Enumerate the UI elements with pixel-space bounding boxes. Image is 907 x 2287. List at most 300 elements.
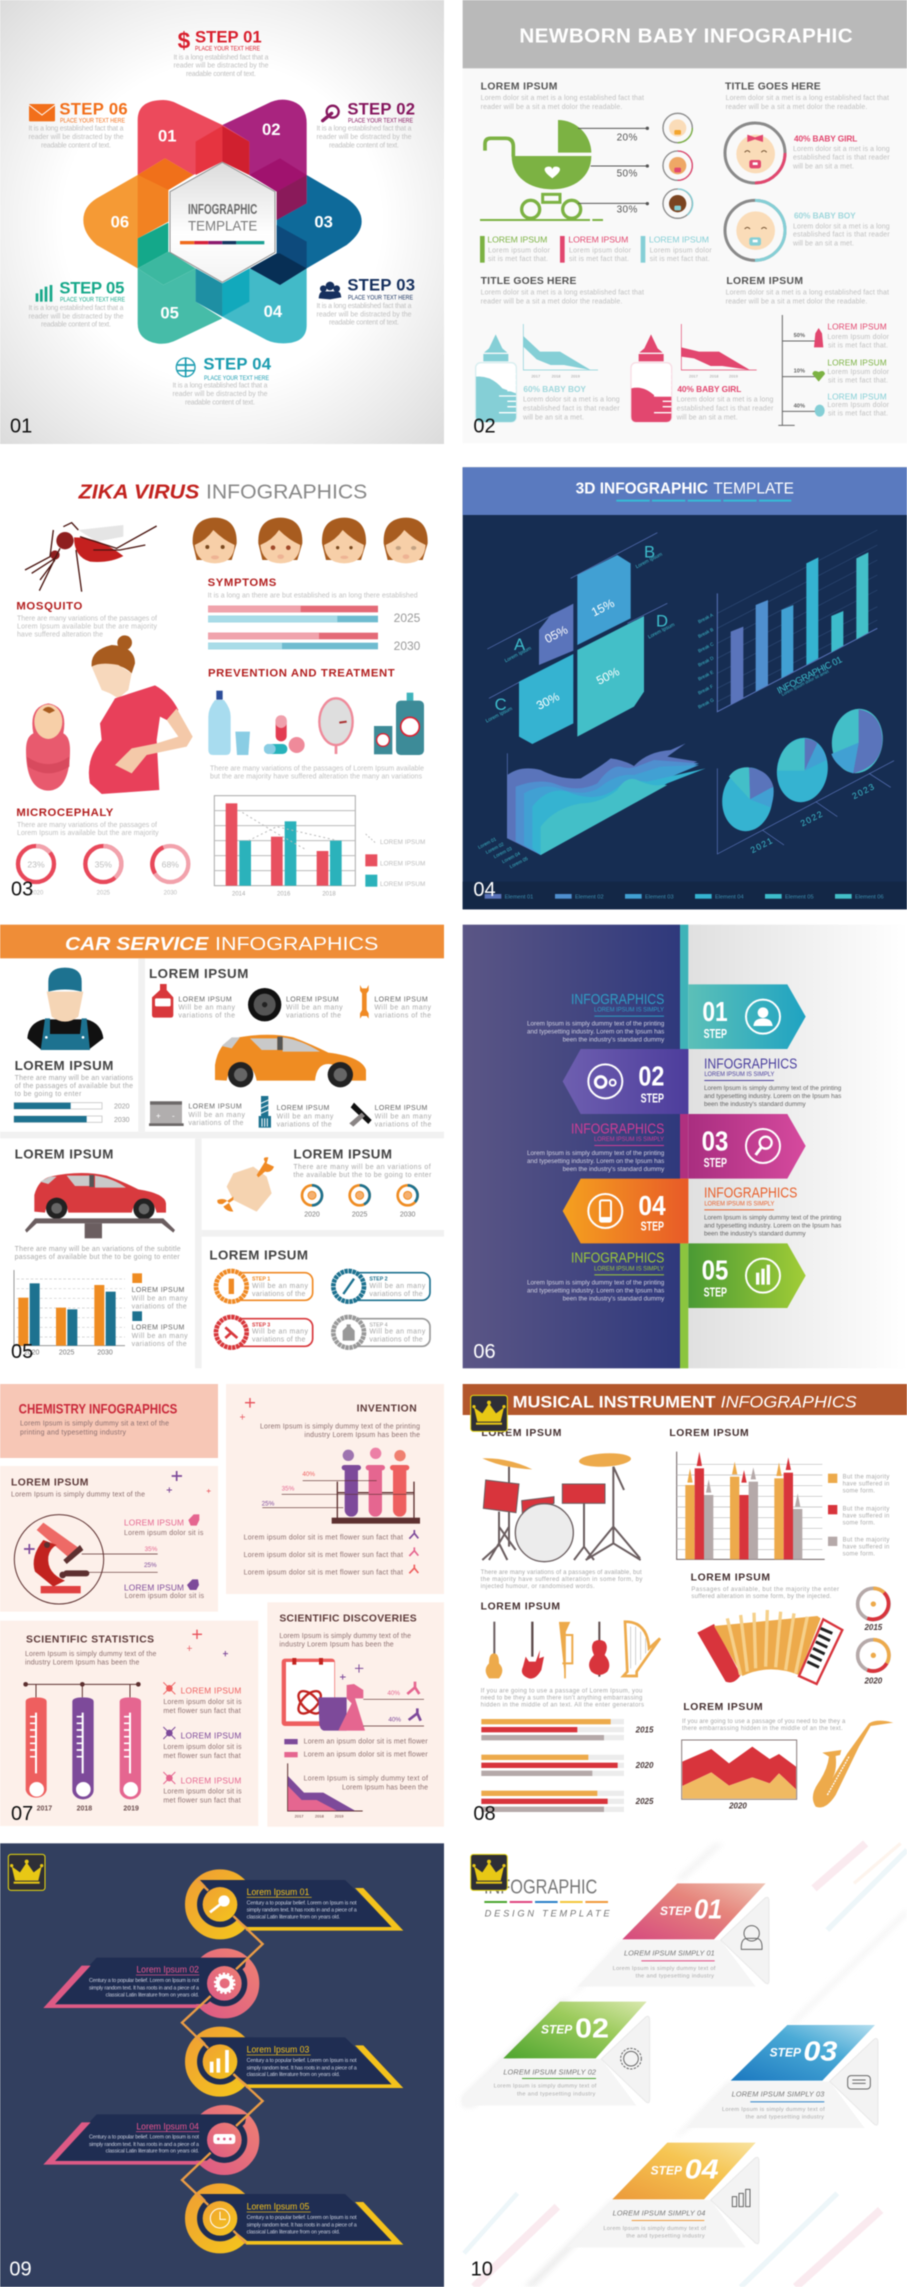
area chart: 2019: [335, 1813, 344, 1818]
text block 04: INFOGRAPHICS: [704, 1186, 798, 1202]
card: scientific discoveries: Lorem an ipsum dolor sit is met flower: [304, 1752, 428, 1759]
arrow 01: STEP: [704, 1027, 727, 1041]
section headings: LOREM IPSUM: [691, 1573, 770, 1584]
text block 01: LOREM IPSUM IS SIMPLY: [594, 1007, 664, 1014]
card: microscope: [0, 1466, 218, 1612]
battery icon item: LOREM IPSUM: [188, 1104, 242, 1111]
chart legend: some form.: [843, 1552, 875, 1558]
text block 02: been the industry's standard dummy: [704, 1101, 806, 1108]
legend strip: Element 04: [715, 895, 744, 901]
pink bottle with chart: Lorem dolor sit a met is a long: [677, 397, 773, 404]
wrench section text: [293, 1147, 432, 1179]
panel 08: musical instruments: [463, 1384, 907, 1825]
illustration: instruments row: [486, 1622, 660, 1679]
panel 09: timeline: [0, 1843, 444, 2287]
section headings and intros: LOREM IPSUM: [481, 81, 557, 92]
pram percentages with leader lines: [578, 127, 649, 216]
bar chart: 2025: [59, 1350, 75, 1357]
card: invention: industry Lorem Ipsum has been the: [304, 1432, 420, 1439]
title banner: [463, 1384, 907, 1415]
title card: printing and typesetting industry: [20, 1429, 126, 1436]
step 02 card: 02: [575, 2012, 609, 2043]
title card: [0, 1384, 218, 1458]
mosquito text: MOSQUITO: [16, 601, 83, 613]
step 03 card: 03: [803, 2035, 838, 2066]
text block 03: [527, 1121, 665, 1173]
arrow 02: [563, 1049, 688, 1114]
chart legend: variations of the: [132, 1303, 187, 1310]
step 1 badge: [216, 1271, 313, 1302]
isometric area chart: Lorem 05: [509, 856, 529, 869]
title: ZIKA VIRUS: [78, 482, 200, 504]
section headings and intros: Lorem dolor sit a met is a long established fact that: [481, 95, 644, 102]
step 2 badge: [333, 1271, 430, 1302]
blue bottle with chart: Lorem dolor sit a met is a long: [523, 397, 620, 404]
panel number 02: 02: [473, 416, 496, 438]
blue bottle with chart: 2018: [552, 373, 561, 378]
step 06 text: PLACE YOUR TEXT HERE: [60, 118, 125, 125]
section headings and intros: [481, 81, 889, 306]
card: invention: Lorem ipsum dolor sit is met flower sun fact that: [244, 1552, 403, 1559]
card: scientific statistics: SCIENTIFIC STATISTICS: [26, 1635, 154, 1646]
text block 04: been the industry's standard dummy: [704, 1230, 806, 1237]
test tubes chart: 35%: [282, 1486, 295, 1493]
title banner: MUSICAL INSTRUMENT: [513, 1392, 716, 1411]
zigzag connector: [182, 1880, 263, 2243]
step 3 badge: STEP 3: [252, 1322, 270, 1328]
isometric tile chart: A: [514, 635, 526, 654]
test tubes chart: 25%: [262, 1500, 275, 1507]
bar chart: 2018: [322, 891, 336, 897]
oil bottle icon item: LOREM IPSUM: [178, 996, 232, 1003]
petal numbers: 03: [314, 213, 333, 232]
card: invention: [226, 1384, 444, 1594]
step 02 text: readable content of text.: [329, 142, 399, 149]
isometric tile chart: [485, 533, 676, 744]
chart legend: LOREM IPSUM: [380, 881, 425, 888]
large baby boy ring: [725, 200, 785, 260]
card: scientific discoveries: Lorem Ipsum is simply dummy text of: [304, 1776, 428, 1783]
area description: [682, 1719, 846, 1732]
step 01: classical Latin literature from on years old.: [247, 1915, 340, 1921]
pink bottle with chart: 2018: [710, 373, 719, 378]
section headings and intros: Lorem dolor sit a met is a long established fact that: [726, 95, 889, 102]
title banner: TEMPLATE: [713, 480, 794, 497]
step 01 text: readable content of text.: [186, 71, 256, 78]
ring gauges: 2020: [863, 1676, 883, 1685]
center hexagon label: TEMPLATE: [188, 218, 257, 234]
step 02 text: reader will be distracted by the: [316, 134, 412, 141]
crown badge: [8, 1854, 45, 1890]
text block 05: LOREM IPSUM IS SIMPLY: [594, 1265, 664, 1272]
illustration: mechanic: [27, 968, 103, 1050]
wrench section text: LOREM IPSUM: [293, 1147, 392, 1162]
baby girl text: 40% BABY GIRL: [794, 133, 857, 143]
card: scientific statistics: Lorem Ipsum is simply dummy text of the: [25, 1651, 156, 1658]
section headings and intros: reader will be a sit a met dolor the readable.: [726, 104, 867, 111]
isometric tile chart: 50%: [594, 664, 622, 688]
panel number 07: 07: [11, 1803, 33, 1825]
card: microscope: 35%: [145, 1546, 158, 1553]
isometric tile chart: Lorem Ipsum: [647, 622, 676, 640]
panel 07: chemistry: [0, 1384, 444, 1827]
vertical percent timeline: LOREM IPSUM: [827, 357, 887, 367]
illustration: drum kit: [482, 1452, 641, 1562]
step 04 text: PLACE YOUR TEXT HERE: [204, 375, 269, 382]
illustration: red car on lift: [25, 1173, 175, 1238]
isometric tile chart: B: [644, 542, 655, 561]
legend blocks: LOREM IPSUM: [568, 234, 628, 244]
card: scientific discoveries: Lorem an ipsum dolor sit is met flower: [304, 1739, 428, 1746]
step 02 card: Lorem Ipsum is simply dummy text of: [494, 2084, 597, 2090]
vertical percent timeline: Lorem Ipsum dolor: [827, 402, 890, 409]
small donut gauges: 2025: [352, 1211, 368, 1218]
step 05 text: STEP 05: [59, 278, 124, 297]
text block 03: been the industry's standard dummy: [563, 1166, 665, 1173]
chart legend: LOREM IPSUM: [132, 1325, 185, 1332]
text block 05: [527, 1251, 665, 1302]
instruments description: [481, 1688, 644, 1708]
pink bottle with chart: 2017: [689, 373, 699, 378]
step 01 card: 01: [694, 1894, 722, 1925]
donut gauges: [18, 846, 188, 896]
legend blocks: sit is met fact that.: [650, 256, 710, 263]
card: invention: INVENTION: [357, 1404, 417, 1415]
pink bottle with chart: established fact is that reader: [677, 406, 774, 413]
blue bottle with chart: 2019: [571, 373, 581, 378]
blue bottle with chart: will be an sit a met.: [522, 415, 584, 422]
mosquito text: have suffered alteration the: [17, 631, 103, 638]
section headings and intros: Lorem dolor sit a met is a long established fact that: [481, 290, 644, 297]
thermometer chart: 2017: [37, 1806, 52, 1813]
step 03 text: STEP 03: [347, 276, 415, 295]
step 06 text: STEP 06: [59, 99, 128, 118]
donut gauges: 68%: [162, 859, 179, 869]
lift section heading: LOREM IPSUM: [15, 1147, 113, 1162]
baby boy text: established fact is that reader: [793, 232, 890, 239]
step 4 badge: [333, 1317, 430, 1348]
area chart: [288, 1763, 363, 1818]
mechanic text and progress bars: LOREM IPSUM: [15, 1058, 113, 1073]
step 02 text: It is a long established fact that a: [316, 126, 412, 133]
battery icon item: variations of the: [188, 1120, 243, 1127]
step 1 badge: STEP 1: [252, 1277, 270, 1283]
chart legend: LOREM IPSUM: [132, 1287, 185, 1294]
arrow 04: [563, 1179, 688, 1243]
pink bottle with chart: will be an sit a met.: [676, 415, 738, 422]
legend strip: Element 01: [505, 895, 533, 901]
step 01 card: STEP: [660, 1904, 692, 1918]
test tubes chart: [262, 1448, 420, 1524]
bar chart: 2014: [232, 891, 246, 897]
isometric tile chart: D: [656, 612, 668, 631]
wrench icon item: variations of the: [374, 1013, 431, 1020]
mechanic text and progress bars: 2030: [114, 1117, 130, 1124]
battery icon item: Will be an many: [188, 1112, 245, 1119]
legend strip: [485, 894, 884, 901]
text block 03: LOREM IPSUM IS SIMPLY: [594, 1136, 664, 1143]
isometric bar chart: Break G: [697, 697, 715, 710]
wrench section text: There are many will be an variations of: [293, 1164, 431, 1171]
legend blocks: Lorem ipsum dolor: [488, 247, 551, 254]
text block 04: LOREM IPSUM IS SIMPLY: [704, 1200, 775, 1207]
step 04 card: STEP: [651, 2164, 683, 2178]
instruments description: If you are going to use a passage of Lorem Ipsum, you: [481, 1688, 642, 1694]
chart legend: But the majority: [843, 1538, 889, 1544]
illustration: swaddled baby: [26, 703, 70, 791]
isometric pie charts: [717, 705, 894, 855]
chart legend: have suffered in: [843, 1513, 889, 1519]
symptoms bars: 2025: [394, 611, 421, 625]
step 2 badge: variations of the: [369, 1291, 423, 1298]
chart legend: [828, 1474, 889, 1558]
panel 03: zika virus: [11, 482, 428, 900]
step 01 text: It is a long established fact that a: [173, 54, 269, 61]
wrench icon item: LOREM IPSUM: [374, 996, 428, 1003]
isometric bar chart: Lorem Ipsum dolor sit amet: [781, 668, 830, 697]
logo title: [484, 1876, 610, 1919]
legend strip: Element 05: [785, 895, 814, 901]
vertical percent timeline: LOREM IPSUM: [827, 392, 887, 402]
step 03: [191, 2033, 403, 2091]
blue bottle with chart: [476, 324, 620, 422]
isometric area chart: Lorem 03: [493, 846, 513, 859]
step 01 text: PLACE YOUR TEXT HERE: [195, 46, 260, 53]
pram percentages with leader lines: 50%: [617, 168, 637, 179]
area chart: 2018: [315, 1813, 325, 1818]
horizontal bars: 2015: [635, 1725, 654, 1734]
section headings: LOREM IPSUM: [481, 1428, 561, 1439]
card: microscope: 25%: [144, 1562, 157, 1569]
step 04 text: reader will be distracted by the: [172, 391, 268, 398]
lift description: There are many will be an variations of the subtitle: [15, 1246, 181, 1253]
wrench section text: the available but the to be going to enter: [293, 1172, 432, 1179]
microcephaly text: MICROCEPHALY: [16, 807, 114, 819]
step 05: classical Latin literature from on years old.: [247, 2229, 340, 2235]
baby boy text: [792, 211, 890, 247]
wrench icon item: Will be an many: [374, 1005, 431, 1012]
steps heading: LOREM IPSUM: [209, 1247, 308, 1262]
step 03 card: the and typesetting industry: [746, 2115, 824, 2121]
step 05: Century a to popular belief. Lorem on Ipsum is not: [247, 2215, 357, 2221]
step 04 card: [567, 2143, 759, 2247]
isometric bar chart: [697, 530, 877, 712]
title banner: NEWBORN BABY INFOGRAPHIC: [519, 24, 853, 47]
bar chart: 2020: [24, 1350, 40, 1357]
step 01: Lorem Ipsum 01: [247, 1887, 309, 1897]
oil bottle icon item: variations of the: [178, 1013, 235, 1020]
mosquito text: [16, 601, 157, 638]
step 03: classical Latin literature from on years old.: [247, 2072, 340, 2078]
step 04 card: LOREM IPSUM SIMPLY 04: [613, 2209, 705, 2218]
prevention description: [210, 766, 424, 781]
arrow 02: STEP: [641, 1091, 664, 1105]
mosquito text: There are many variations of the passages of: [17, 615, 157, 622]
tyre icon item: [248, 988, 343, 1021]
step 01 text: STEP 01: [195, 28, 262, 47]
text block 02: LOREM IPSUM IS SIMPLY: [704, 1071, 775, 1078]
legend blocks: LOREM IPSUM: [649, 234, 709, 244]
prevention description: There are many variations of the passages of Lorem Ipsum available: [210, 766, 424, 773]
illustration: mosquito: [25, 523, 157, 592]
vertical percent timeline: LOREM IPSUM: [827, 321, 887, 331]
vertical percent timeline: 40%: [794, 403, 805, 409]
card: scientific statistics: met flower sun fact that: [163, 1753, 241, 1760]
step 04: classical Latin literature from on years old.: [106, 2149, 199, 2155]
step 01: simply random text. It has roots in and a piece of a: [247, 1908, 357, 1914]
drums description: [481, 1570, 642, 1590]
step 01: Century a to popular belief. Lorem on Ipsum is not: [247, 1900, 357, 1906]
vertical percent timeline: sit is met fact that.: [828, 378, 888, 385]
section headings and intros: LOREM IPSUM: [726, 276, 803, 287]
card: microscope: LOREM IPSUM: [124, 1518, 184, 1528]
step 2 badge: Will be an many: [369, 1283, 426, 1290]
card: scientific statistics: LOREM IPSUM: [181, 1775, 241, 1785]
chart legend: have suffered in: [843, 1545, 889, 1551]
scraper icon item: LOREM IPSUM: [375, 1105, 428, 1112]
baby girl text: established fact is that reader: [793, 155, 890, 162]
panel number 06: 06: [473, 1341, 496, 1363]
blue bottle with chart: established fact is that reader: [523, 406, 620, 413]
card: scientific discoveries: 40%: [387, 1690, 400, 1697]
instruments description: hidden in the middle of an text. All the enter generators: [481, 1702, 644, 1708]
horizontal bars: 2020: [635, 1761, 654, 1770]
icon: microscope: [14, 1515, 104, 1604]
arrow 04: STEP: [641, 1219, 664, 1233]
pink bottle with chart: 40% BABY GIRL: [677, 384, 741, 394]
microcephaly text: [16, 807, 159, 837]
legend blocks: [480, 234, 712, 263]
isometric area chart: Lorem 02: [485, 841, 505, 855]
chart legend: LOREM IPSUM: [380, 860, 425, 867]
text block 04: and typesetting industry. Lorem on the Ipsum has: [704, 1222, 841, 1229]
step 03 text: readable content of text.: [329, 320, 399, 327]
isometric bar chart: Break B: [697, 627, 714, 639]
step 01 text: reader will be distracted by the: [173, 63, 269, 70]
blue bottle with chart: 2017: [531, 373, 541, 378]
step 03: Lorem Ipsum 03: [247, 2045, 309, 2055]
bar chart: [214, 796, 355, 897]
card: scientific statistics: [0, 1621, 258, 1826]
step 03: simply random text. It has roots in and a piece of a: [247, 2065, 357, 2071]
section headings: [481, 1428, 770, 1713]
card: scientific statistics: industry Lorem Ipsum has been the: [25, 1660, 139, 1667]
thermometer chart: 2019: [123, 1806, 139, 1813]
lift description: passages of available but the to be going to enter: [15, 1254, 180, 1261]
title banner: [0, 925, 444, 958]
illustration: accordion: [697, 1610, 842, 1684]
step 03 card: [686, 2025, 878, 2128]
baby boy text: 60% BABY BOY: [794, 211, 856, 221]
small donut gauges: [302, 1185, 418, 1218]
isometric tile chart: Lorem Ipsum: [504, 646, 532, 664]
illustration: hand with wrench: [217, 1157, 274, 1212]
mosquito text: Lorem Ipsum available but the are majority: [17, 623, 157, 630]
panel number 04: 04: [473, 879, 496, 901]
step 02 card: LOREM IPSUM SIMPLY 02: [503, 2067, 596, 2076]
legend blocks: Lorem ipsum dolor: [650, 247, 712, 254]
petal numbers: 06: [111, 213, 129, 232]
step 04: Lorem Ipsum 04: [136, 2121, 199, 2131]
vertical percent timeline: 10%: [794, 369, 805, 375]
drums description: There are many variations of a passages of available, but: [481, 1570, 642, 1576]
step 01 card: the and typesetting industry: [636, 1974, 714, 1980]
microcephaly text: There are many variations of the passages of: [17, 822, 157, 829]
step 3 badge: [216, 1317, 313, 1348]
legend blocks: sit is met fact that.: [569, 256, 629, 263]
oil bottle icon item: [152, 984, 235, 1020]
step 03 card: LOREM IPSUM SIMPLY 03: [732, 2090, 825, 2099]
step 04: simply random text. It has roots in and a piece of a: [89, 2142, 199, 2148]
spark plug icon item: [259, 1096, 334, 1129]
petal numbers: 02: [262, 120, 281, 139]
pink bottle with chart: [631, 324, 774, 422]
isometric pie charts: 2022: [799, 809, 824, 828]
card: microscope: Lorem Ipsum is simply dummy text of the: [11, 1491, 145, 1498]
diagonal pastel streaks: [464, 1843, 907, 2287]
card: scientific statistics: Lorem ipsum dolor sit is: [163, 1789, 242, 1796]
donut gauges: 2025: [97, 890, 111, 896]
card: scientific statistics: Lorem ipsum dolor sit is: [163, 1699, 242, 1706]
accordion description: Passages of available, but the majority the enter: [691, 1587, 839, 1593]
logo title: INFOGRAPHIC: [484, 1876, 597, 1898]
bar chart: [14, 1270, 125, 1357]
step 02: simply random text. It has roots in and a piece of a: [89, 1985, 199, 1991]
thermometer chart: [23, 1682, 141, 1813]
title banner: [463, 467, 907, 515]
pram percentages with leader lines: 30%: [617, 205, 637, 216]
text block 01: been the industry's standard dummy: [563, 1037, 665, 1044]
step 4 badge: STEP 4: [369, 1322, 388, 1328]
panel 02: newborn baby: [463, 0, 907, 443]
title banner: [463, 0, 907, 68]
title banner: INFOGRAPHICS: [721, 1392, 857, 1411]
text block 05: and typesetting industry. Lorem on the Ipsum has: [527, 1287, 664, 1294]
title: [78, 482, 367, 504]
step 2 badge: STEP 2: [369, 1277, 388, 1283]
step 02 card: [463, 2002, 650, 2106]
card: scientific discoveries: [267, 1602, 444, 1827]
wrench icon item: [360, 985, 431, 1020]
step 02: classical Latin literature from on years old.: [106, 1992, 199, 1998]
baby boy text: will be an sit a met.: [792, 240, 854, 247]
panel number 10: 10: [471, 2258, 493, 2280]
isometric pie charts: 2023: [850, 782, 876, 801]
isometric bar chart: Break D: [697, 655, 715, 668]
legend strip: Element 06: [855, 895, 884, 901]
battery icon item: +: [156, 1111, 161, 1120]
step 05 text: readable content of text.: [41, 322, 111, 329]
step 05: simply random text. It has roots in and a piece of a: [247, 2222, 357, 2228]
small donut gauges: 2020: [304, 1211, 320, 1218]
step 04 text: STEP 04: [203, 354, 272, 373]
vertical percent timeline: Lorem Ipsum dolor: [827, 369, 890, 376]
panel 05: car service: [0, 925, 444, 1368]
text block 05: INFOGRAPHICS: [571, 1251, 665, 1267]
chart legend: variations of the: [132, 1341, 187, 1348]
legend blocks: LOREM IPSUM: [487, 234, 547, 244]
text block 02: and typesetting industry. Lorem on the Ipsum has: [704, 1093, 841, 1100]
step 03 text: It is a long established fact that a: [316, 303, 412, 310]
step 03 card: Lorem Ipsum is simply dummy text of: [722, 2107, 825, 2113]
step 05 text: reader will be distracted by the: [28, 313, 124, 320]
step 3 badge: Will be an many: [252, 1329, 308, 1336]
spark plug icon item: Will be an many: [277, 1114, 334, 1121]
card: microscope: Lorem ipsum dolor sit is: [125, 1593, 204, 1600]
ring gauges: [858, 1588, 889, 1685]
illustration: orange car: [215, 1035, 366, 1087]
step 04 text: [172, 354, 272, 406]
